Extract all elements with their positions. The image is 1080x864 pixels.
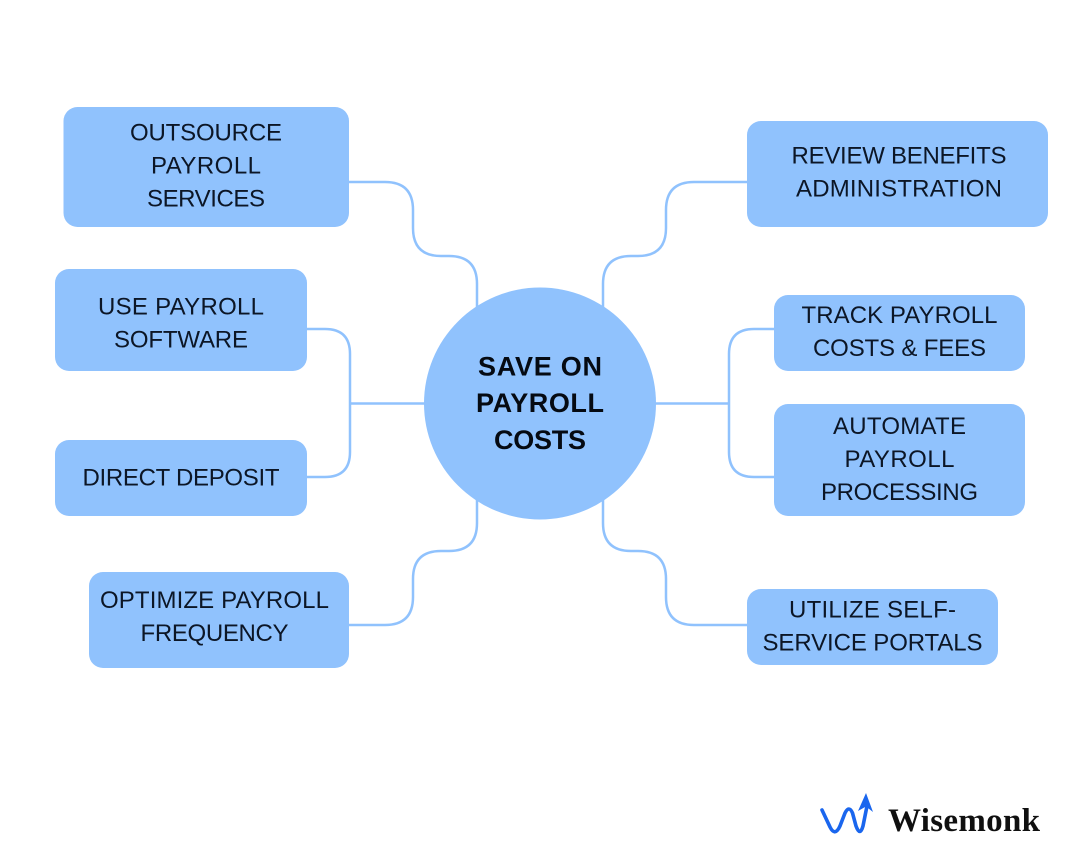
central circle: save on payroll costs: COSTS bbox=[494, 425, 586, 455]
box: direct deposit: DIRECT DEPOSIT bbox=[82, 464, 280, 492]
box: utilize self-service portals bbox=[747, 589, 998, 665]
box: review benefits administration: ADMINISTRATION bbox=[796, 176, 1002, 202]
icon: rising wave arrow bbox=[822, 793, 873, 832]
box: track payroll costs and fees: COSTS & FEES bbox=[813, 335, 986, 362]
box: utilize self-service portals: UTILIZE SELF- bbox=[789, 596, 956, 624]
box: use payroll software bbox=[55, 269, 307, 371]
box: optimize payroll frequency: FREQUENCY bbox=[140, 620, 288, 647]
box: automate payroll processing: PAYROLL bbox=[844, 446, 954, 473]
connector: track costs and automate processing bbox=[654, 329, 774, 477]
box: automate payroll processing bbox=[774, 404, 1025, 516]
box: outsource payroll services bbox=[64, 107, 349, 227]
connector: use payroll software and direct deposit bbox=[307, 329, 426, 477]
box: track payroll costs and fees: TRACK PAYROLL bbox=[802, 302, 998, 329]
box: optimize payroll frequency: OPTIMIZE PAYROLL bbox=[100, 587, 329, 614]
box: use payroll software: USE PAYROLL bbox=[98, 294, 264, 320]
central circle: save on payroll costs: PAYROLL bbox=[476, 388, 604, 418]
connector: review benefits administration bbox=[603, 182, 747, 308]
box: outsource payroll services: SERVICES bbox=[147, 186, 265, 212]
connector: utilize self-service portals bbox=[603, 500, 747, 625]
box: use payroll software: SOFTWARE bbox=[114, 326, 248, 354]
connector: optimize payroll frequency bbox=[349, 500, 477, 625]
connector: outsource payroll services bbox=[349, 182, 477, 308]
box: optimize payroll frequency bbox=[89, 572, 349, 668]
logo: Wisemonk bbox=[822, 793, 1041, 839]
box: review benefits administration bbox=[747, 121, 1048, 227]
box: utilize self-service portals: SERVICE PORTALS bbox=[762, 630, 982, 656]
box: review benefits administration: REVIEW BENEFITS bbox=[792, 142, 1006, 170]
wordmark: Wisemonk bbox=[888, 803, 1041, 839]
box: outsource payroll services: OUTSOURCE bbox=[130, 120, 282, 146]
box: track payroll costs and fees bbox=[774, 295, 1025, 371]
central circle: save on payroll costs bbox=[424, 288, 656, 520]
box: direct deposit bbox=[55, 440, 307, 516]
box: outsource payroll services: PAYROLL bbox=[151, 152, 261, 180]
central circle: save on payroll costs: SAVE ON bbox=[478, 352, 602, 382]
box: automate payroll processing: AUTOMATE bbox=[833, 413, 966, 440]
box: automate payroll processing: PROCESSING bbox=[821, 479, 978, 506]
